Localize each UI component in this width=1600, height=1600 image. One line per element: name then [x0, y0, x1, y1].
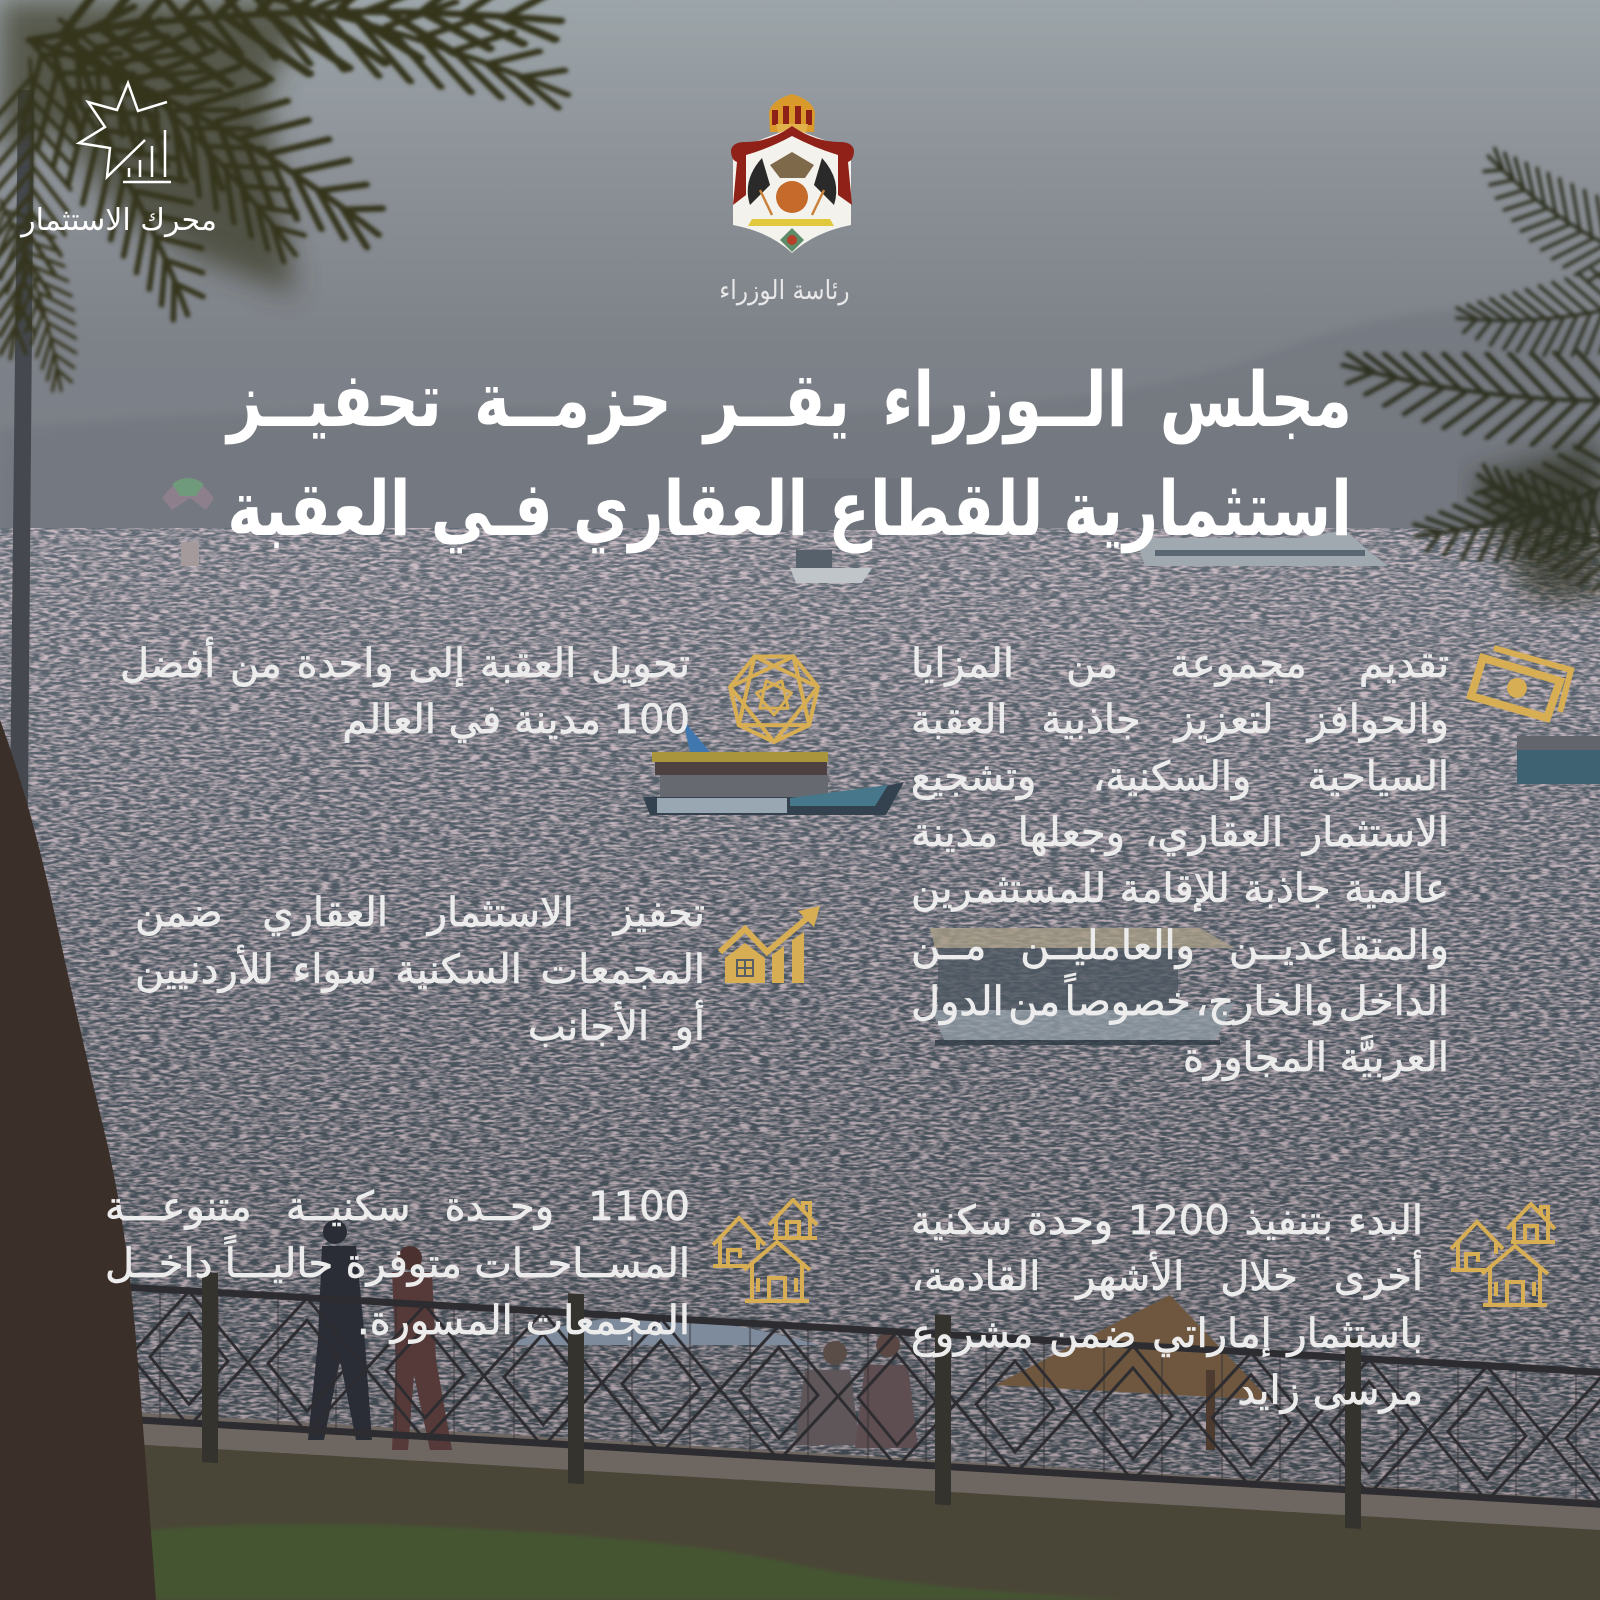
text line — [135, 944, 705, 994]
text line: خلال — [1220, 1254, 1298, 1300]
wall — [130, 1444, 1600, 1600]
text line: وجعلها — [1018, 810, 1125, 856]
text line: والسكنية، — [1092, 754, 1251, 800]
palm fronds: top left — [0, 0, 586, 394]
text line: من — [230, 641, 282, 687]
text line: لتعزيز — [1175, 697, 1274, 743]
people — [308, 1220, 918, 1450]
text line: الدول — [911, 979, 1004, 1025]
walkway — [130, 1412, 1600, 1530]
text line: المزايا — [911, 641, 1014, 687]
text line — [911, 697, 1449, 744]
logo: investment engine — [20, 80, 217, 238]
text line: للمستثمرين — [911, 866, 1106, 912]
text line: السكنية — [395, 947, 522, 993]
text line: من — [1008, 979, 1060, 1025]
text line: والحوافز — [1308, 697, 1449, 743]
icon: geometric star — [728, 654, 820, 744]
text line: مجموعة — [1170, 641, 1307, 687]
distant ship — [780, 478, 1388, 566]
text line: خصوصاً — [1065, 979, 1191, 1025]
text line: والمتقاعديــن — [1229, 923, 1449, 969]
text line: وتشجيع — [911, 754, 1036, 800]
emblem: Jordan coat of arms — [731, 94, 854, 253]
text line: الداخل — [1339, 979, 1449, 1025]
text line — [911, 923, 1449, 970]
parasail — [162, 478, 214, 566]
title line 2: العقبة — [227, 464, 411, 553]
text line: إماراتي — [1152, 1311, 1272, 1357]
text line: باستثمار — [1287, 1311, 1423, 1357]
text line: 100 مدينة في العالم — [342, 697, 690, 743]
icon: money — [1466, 645, 1575, 723]
text line: والخارج، — [1195, 979, 1334, 1025]
text line: للإقامة — [1120, 866, 1230, 912]
text line: سكنيــة — [286, 1184, 410, 1230]
text line: العربيَّة المجاورة — [1183, 1035, 1449, 1081]
crown — [769, 94, 815, 140]
railing fence — [130, 1268, 1600, 1544]
text line: مــن — [911, 923, 986, 969]
title line 1: حزمــة — [474, 355, 672, 444]
title line 2: فـي — [431, 464, 553, 553]
text line — [911, 1306, 1423, 1362]
text line: البدء — [1348, 1198, 1423, 1244]
text line: وحــدة — [445, 1184, 554, 1230]
text line: متوفرة — [346, 1241, 462, 1287]
boat in centre — [643, 720, 904, 815]
text line — [911, 866, 1449, 912]
text line: المجمعات المسورة. — [357, 1298, 690, 1344]
shrubs — [0, 1524, 1130, 1600]
title line 1 — [224, 355, 1352, 444]
thatch umbrella — [995, 1295, 1270, 1450]
panel: 1200 units, Marsa Zayed — [911, 1198, 1423, 1414]
text line: تحويل — [591, 641, 690, 687]
text line: تحفيز — [614, 890, 705, 936]
text line: إلى — [408, 641, 465, 687]
text line — [120, 636, 690, 688]
ribbon and medal — [748, 219, 834, 252]
title line 2: العقاري — [573, 464, 808, 553]
text line: والعامليــن — [1020, 923, 1195, 969]
text line — [105, 1234, 690, 1287]
text line: أو الأجانب — [528, 1004, 705, 1050]
text line: داخــل — [105, 1241, 212, 1287]
text line: 1100 — [588, 1184, 690, 1230]
text line: 1200 — [1128, 1198, 1230, 1244]
text line: مدينة — [911, 810, 998, 856]
text line: العقبة — [480, 641, 576, 687]
text line: العقاري، — [1145, 810, 1283, 856]
panel: 1100 housing units — [105, 1184, 690, 1344]
text line: الاستثمار — [428, 890, 574, 936]
text line — [911, 1193, 1423, 1249]
text line: حاليـــاً — [225, 1241, 333, 1287]
logo label: محرك الاستثمار — [21, 203, 217, 238]
text line: العقبة — [911, 697, 1007, 743]
boat at right edge — [1517, 736, 1600, 784]
icon: star with bars — [76, 80, 171, 184]
thin palm trunk — [6, 90, 34, 1460]
shield — [733, 128, 851, 253]
emblem caption: prime ministry: رئاسة الوزراء — [719, 276, 850, 306]
text line: العقاري — [262, 890, 388, 936]
icon: houses, left column — [712, 1198, 818, 1303]
text line: عالمية — [1344, 866, 1449, 912]
text line: سواء — [293, 947, 377, 993]
title — [224, 355, 1352, 554]
icon: house with growth arrow — [718, 906, 820, 983]
text line: المجمعات — [540, 947, 705, 993]
title line 1: الــوزراء — [882, 355, 1128, 444]
text line: جاذبة — [1243, 866, 1331, 912]
text line: أخرى — [1334, 1254, 1423, 1300]
text line: ضمن — [135, 890, 223, 936]
text line: مرسى زايد — [1237, 1368, 1423, 1414]
text line: مشروع — [911, 1311, 1033, 1357]
text line — [911, 972, 1449, 1026]
text line: المســاحــات — [474, 1241, 690, 1287]
title line 2: استثمارية — [1063, 464, 1352, 553]
text line: من — [1066, 641, 1118, 687]
text line: متنوعـــة — [105, 1184, 252, 1230]
icon: houses, right column — [1449, 1202, 1559, 1310]
panel: stimulating real estate — [135, 890, 705, 1050]
white umbrella — [510, 1318, 820, 1345]
text line: أفضل — [120, 641, 215, 687]
mantle — [731, 126, 854, 205]
text line — [911, 810, 1449, 856]
flags and eagle — [748, 152, 836, 215]
text line: سكنية — [911, 1198, 1012, 1244]
text line — [911, 1249, 1423, 1305]
text line: الاستثمار — [1303, 810, 1449, 856]
panel: top 100 cities — [120, 636, 690, 744]
text line: الأشهر — [1076, 1254, 1184, 1300]
boat behind text — [930, 928, 1235, 1045]
title line 1: تحفيــز — [227, 355, 442, 444]
title line 2: للقطاع — [828, 464, 1043, 553]
panel: incentives paragraph — [911, 641, 1449, 1082]
text line: جاذبية — [1041, 697, 1141, 743]
text line: واحدة — [297, 641, 394, 687]
large palm trunk — [0, 720, 156, 1600]
text line: بتنفيذ — [1244, 1198, 1333, 1244]
text line: ضمن — [1049, 1311, 1137, 1357]
title line 1: يقــر — [704, 355, 850, 444]
text line: القادمة، — [911, 1254, 1040, 1300]
title line 1: مجلس — [1160, 355, 1352, 444]
text line: السياحية — [1308, 754, 1449, 800]
text line — [135, 890, 705, 936]
text line — [911, 754, 1449, 800]
text line — [911, 641, 1449, 687]
palm fronds: right — [1343, 145, 1600, 612]
small white boat — [790, 550, 872, 583]
text line: وحدة — [1027, 1198, 1113, 1244]
text line — [105, 1184, 690, 1230]
title line 2 — [227, 464, 1352, 554]
text line: تقديم — [1359, 641, 1449, 687]
text line: للأردنيين — [135, 947, 274, 993]
